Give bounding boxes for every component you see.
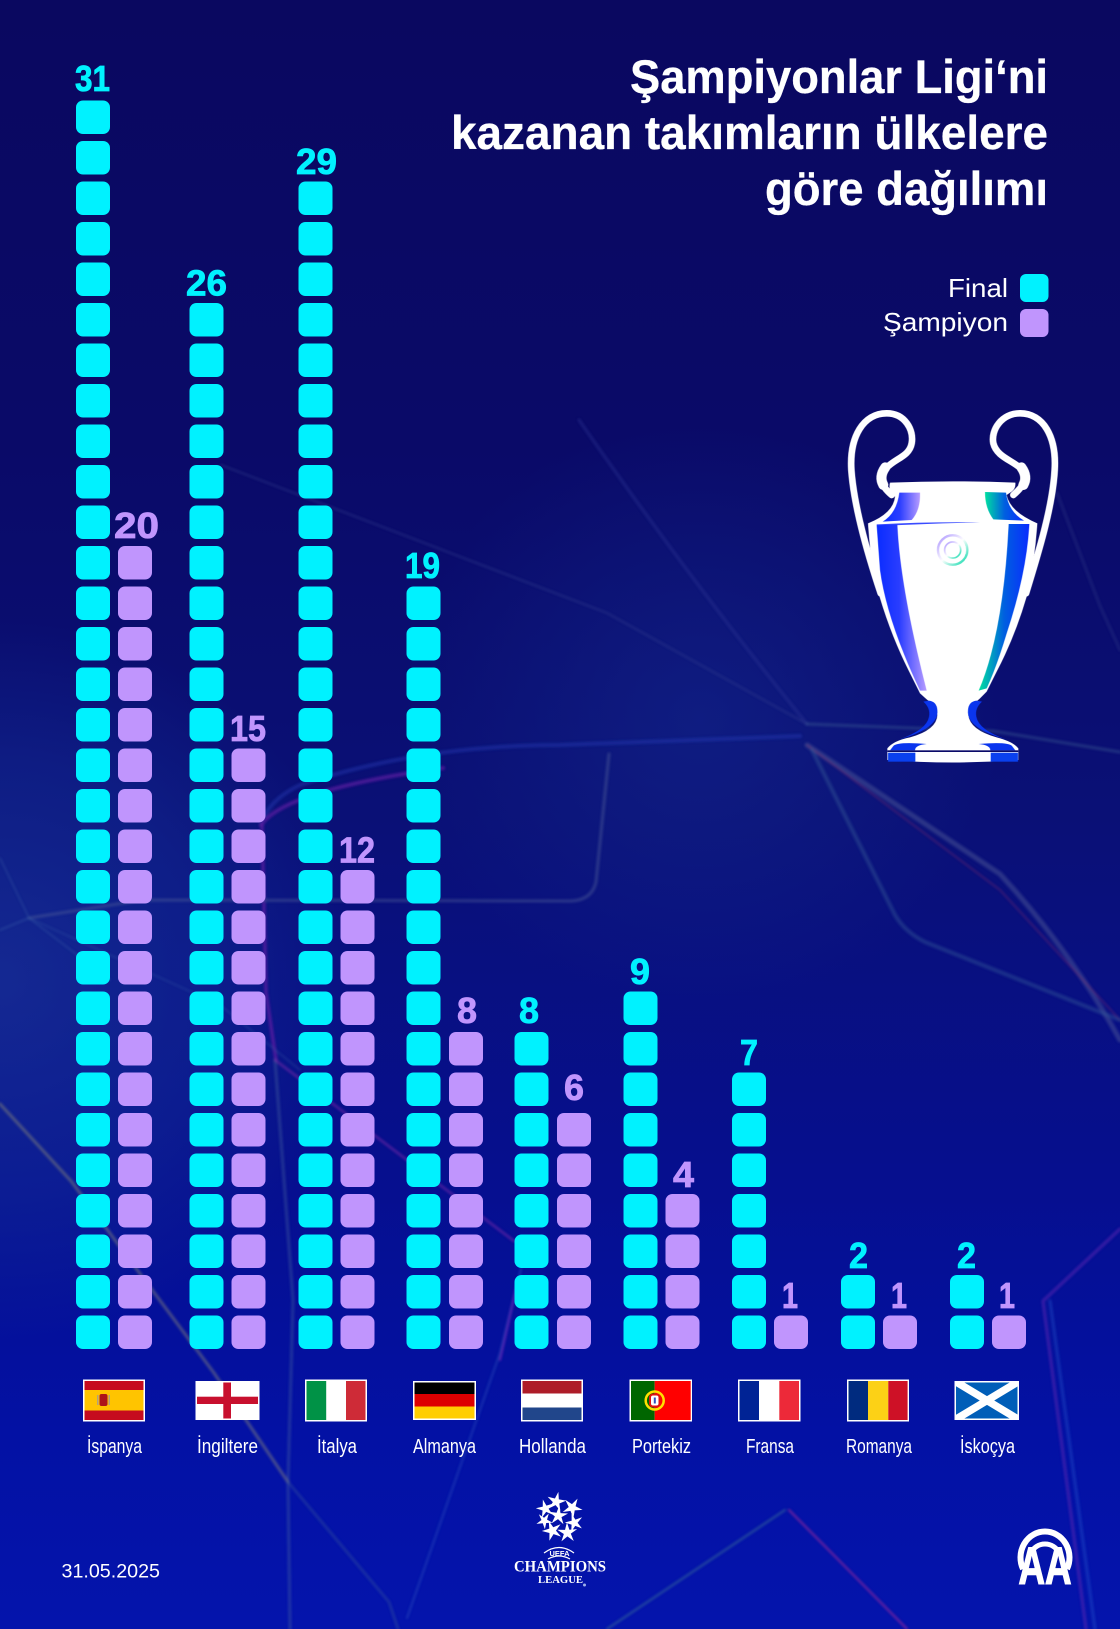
value: Scotland finals: 2 (957, 1235, 976, 1276)
icon: flag of France (738, 1380, 800, 1422)
logo: UEFA Champions League: UEFA (550, 1551, 570, 1558)
value: Germany finals: 19 (405, 545, 440, 586)
bar: Spain finals (76, 100, 110, 1349)
value: Scotland titles: 1 (999, 1275, 1015, 1316)
value: Netherlands titles: 6 (564, 1067, 584, 1108)
value: Portugal titles: 4 (673, 1154, 694, 1195)
title: Şampiyonlar Ligi‘ni (630, 50, 1048, 103)
label: Romanya: Romanya (846, 1436, 913, 1458)
value: Portugal finals: 9 (630, 951, 650, 992)
bar: Portugal finals (624, 992, 658, 1349)
icon: flag of Germany (413, 1381, 476, 1420)
icon: flag of Spain (83, 1380, 145, 1422)
value: Spain finals: 31 (75, 58, 110, 99)
bar: England titles (232, 748, 266, 1349)
title: göre dağılımı (765, 162, 1048, 215)
bar: Germany finals (406, 586, 440, 1349)
legend: Final (948, 273, 1008, 303)
value: Netherlands finals: 8 (519, 990, 539, 1031)
bar: Italy finals (298, 182, 332, 1349)
value: England titles: 15 (230, 708, 266, 749)
bar: Italy titles (340, 870, 374, 1349)
value: France titles: 1 (782, 1275, 798, 1316)
legend: Şampiyon (883, 307, 1008, 337)
title: kazanan takımların ülkelere (451, 106, 1048, 159)
bar: Netherlands titles (557, 1113, 591, 1349)
label: İspanya: İspanya (87, 1435, 143, 1458)
bar: Scotland finals (950, 1275, 984, 1349)
chart: finals and titles by country (75, 58, 1026, 1349)
icon: flag of Portugal (630, 1380, 692, 1422)
logo: Anadolu Agency (1018, 1532, 1072, 1596)
bar: Portugal titles (666, 1194, 700, 1349)
bar: France finals (732, 1072, 766, 1349)
date: 31.05.2025 (62, 1562, 160, 1582)
logo: Anadolu Agency: AA (1018, 1538, 1072, 1596)
value: Italy titles: 12 (339, 830, 375, 870)
value: France finals: 7 (740, 1032, 758, 1073)
logo: UEFA Champions League: LEAGUE (538, 1575, 583, 1586)
value: Romania finals: 2 (849, 1235, 868, 1276)
icon: flag of Scotland (953, 1380, 1021, 1421)
bar: Romania titles (883, 1316, 917, 1349)
label: Portekiz: Portekiz (632, 1436, 691, 1458)
logo: UEFA Champions League: CHAMPIONS (514, 1558, 606, 1576)
bar: Spain titles (118, 546, 152, 1349)
value: Romania titles: 1 (891, 1275, 907, 1316)
bar: England finals (190, 303, 224, 1349)
label: İtalya: İtalya (317, 1435, 358, 1458)
icon: trophy (851, 413, 1055, 762)
bar: Romania finals (841, 1275, 875, 1349)
value: Germany titles: 8 (457, 990, 477, 1031)
value: Italy finals: 29 (296, 141, 337, 182)
bar: France titles (774, 1316, 808, 1349)
bar: Netherlands finals (514, 1032, 548, 1349)
legend (883, 273, 1048, 337)
icon: flag of England (196, 1381, 260, 1420)
title (451, 50, 1048, 215)
bar: Germany titles (449, 1032, 483, 1349)
label: İskoçya: İskoçya (960, 1435, 1016, 1458)
value: England finals: 26 (186, 262, 227, 304)
label: Fransa: Fransa (746, 1436, 795, 1458)
logo: UEFA Champions League (514, 1490, 606, 1586)
label: İngiltere: İngiltere (197, 1435, 258, 1458)
icon: flag of Romania (847, 1380, 909, 1422)
bar: Scotland titles (992, 1316, 1026, 1349)
icon: flag of Italy (305, 1380, 367, 1422)
icon: flag of the Netherlands (521, 1380, 583, 1422)
icon: starball (533, 1490, 587, 1545)
label: Almanya: Almanya (413, 1436, 477, 1458)
label: Hollanda: Hollanda (519, 1436, 587, 1458)
value: Spain titles: 20 (114, 505, 159, 546)
